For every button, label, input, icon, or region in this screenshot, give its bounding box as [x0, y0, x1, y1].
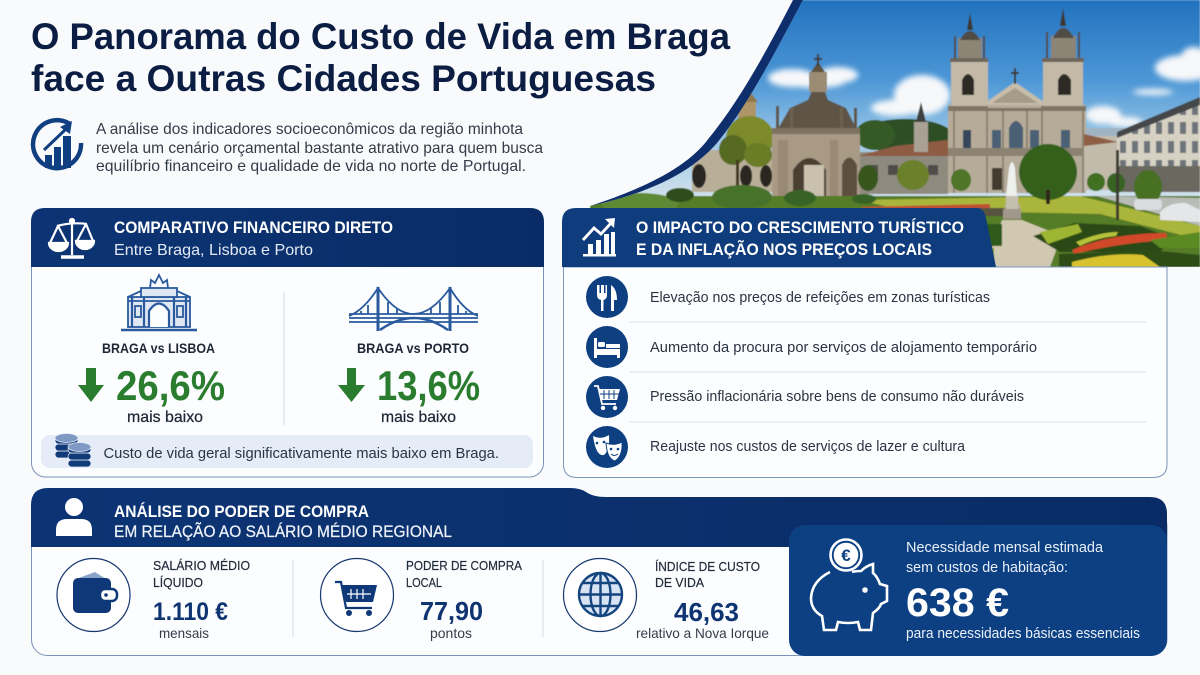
comparison: Braga vs Lisboa: BRAGA vs LISBOA: [102, 340, 215, 356]
comparison: Braga vs Porto: [338, 340, 480, 426]
list item: leisure: [586, 426, 966, 468]
tree near arch: [726, 116, 774, 160]
garden: [590, 196, 1200, 267]
list item: meals: [586, 276, 990, 318]
panel header: [31, 208, 544, 267]
stat: salário médio: SALÁRIO MÉDIO: [153, 558, 250, 573]
comparison: Braga vs Lisboa: [78, 340, 225, 426]
panel header: E DA INFLAÇÃO NOS PREÇOS LOCAIS: [636, 239, 932, 259]
list item: lodging: [586, 326, 1037, 368]
stat: poder de compra: LOCAL: [406, 575, 442, 590]
panel: poder de compra: [31, 488, 1167, 656]
icon: piggy bank: €: [841, 546, 851, 565]
stat: salário médio: [57, 558, 250, 641]
comparison: Braga vs Lisboa: 26,6%: [116, 362, 225, 409]
intro text: A análise dos indicadores socioeconômicos da região minhota: [96, 121, 523, 138]
list item: lodging: Aumento da procura por serviços de alojamento temporário: [650, 339, 1037, 356]
stat: índice de custo de vida: ÍNDICE DE CUSTO: [655, 559, 760, 574]
title: [31, 15, 731, 99]
icon: rising chart: [583, 218, 616, 256]
stat: salário médio: 1.110 €: [153, 598, 228, 626]
photo: Braga church and gardens: [590, 0, 1200, 267]
list item: leisure: Reajuste nos custos de serviços de lazer e cultura: [650, 438, 966, 455]
icon: person: [56, 498, 92, 536]
panel header: [31, 488, 1167, 547]
title: face a Outras Cidades Portuguesas: [31, 57, 656, 99]
icon: piggy bank: [811, 540, 887, 630]
panel header: O IMPACTO DO CRESCIMENTO TURÍSTICO: [636, 218, 964, 237]
icon: wallet: [73, 572, 117, 613]
callout: overall cost: [41, 435, 533, 468]
stat: poder de compra: pontos: [430, 625, 472, 641]
left building behind arch: [692, 150, 774, 192]
icon: growth chart in circle: [33, 120, 81, 168]
towers: [951, 60, 988, 110]
list item: consumer goods: [586, 376, 1024, 418]
callout: overall cost: Custo de vida geral significativamente mais baixo em Braga.: [104, 445, 499, 462]
cars: [1160, 203, 1200, 222]
icon: scales: [49, 219, 94, 257]
icon: globe: [579, 573, 622, 616]
hill trees: [877, 118, 949, 152]
intro text: [96, 121, 543, 175]
panel header: COMPARATIVO FINANCEIRO DIRETO: [114, 219, 393, 237]
stat: índice de custo de vida: relativo a Nova Iorque: [636, 625, 769, 641]
panel header: [562, 208, 996, 267]
icon: Porto bridge: [349, 287, 478, 331]
panel: comparativo financeiro: [31, 208, 544, 477]
curved navy band along photo: [590, 0, 803, 206]
stat: poder de compra: PODER DE COMPRA: [406, 558, 522, 573]
title: O Panorama do Custo de Vida em Braga: [31, 15, 731, 57]
panel header: ANÁLISE DO PODER DE COMPRA: [114, 502, 369, 521]
callout: necessidade mensal: Necessidade mensal estimada: [906, 539, 1104, 556]
list item: meals: Elevação nos preços de refeições em zonas turísticas: [650, 289, 990, 306]
statue: [1006, 162, 1017, 196]
callout: necessidade mensal: para necessidades básicas essenciais: [906, 625, 1140, 642]
right buildings: [1084, 136, 1118, 190]
icon: Lisbon arch: [121, 275, 197, 330]
comparison: Braga vs Lisboa: mais baixo: [127, 409, 203, 426]
stat: índice de custo de vida: [564, 558, 769, 641]
church: [948, 8, 1086, 193]
intro text: equilíbrio financeiro e qualidade de vida no norte de Portugal.: [96, 158, 526, 175]
stat: índice de custo de vida: DE VIDA: [655, 575, 704, 590]
mid buildings: [860, 152, 948, 194]
comparison: Braga vs Porto: 13,6%: [377, 362, 480, 409]
comparison: Braga vs Porto: BRAGA vs PORTO: [357, 340, 469, 356]
intro text: revela um cenário orçamental bastante atrativo para quem busca: [96, 140, 543, 157]
trees: [1019, 144, 1077, 200]
stat: salário médio: mensais: [159, 625, 209, 641]
arch monument: [772, 54, 860, 200]
divider: [283, 292, 285, 425]
stat: poder de compra: 77,90: [420, 596, 483, 626]
icon: coins: [55, 434, 91, 467]
callout: necessidade mensal: sem custos de habitação:: [906, 559, 1068, 576]
callout: necessidade mensal: 638 €: [906, 581, 1009, 625]
panel header: EM RELAÇÃO AO SALÁRIO MÉDIO REGIONAL: [114, 522, 452, 541]
callout: necessidade mensal: [789, 525, 1167, 656]
comparison: Braga vs Porto: mais baixo: [381, 409, 456, 426]
panel: impacto turístico: [562, 208, 1167, 478]
icon: cart: [335, 582, 377, 616]
stat: poder de compra: [320, 558, 522, 641]
stat: salário médio: LÍQUIDO: [153, 575, 203, 590]
stat: índice de custo de vida: 46,63: [674, 597, 739, 627]
list item: consumer goods: Pressão inflacionária sobre bens de consumo não duráveis: [650, 388, 1024, 405]
paths and flower beds: [992, 219, 1057, 266]
shrubs: [602, 192, 678, 208]
panel header: Entre Braga, Lisboa e Porto: [114, 242, 313, 259]
